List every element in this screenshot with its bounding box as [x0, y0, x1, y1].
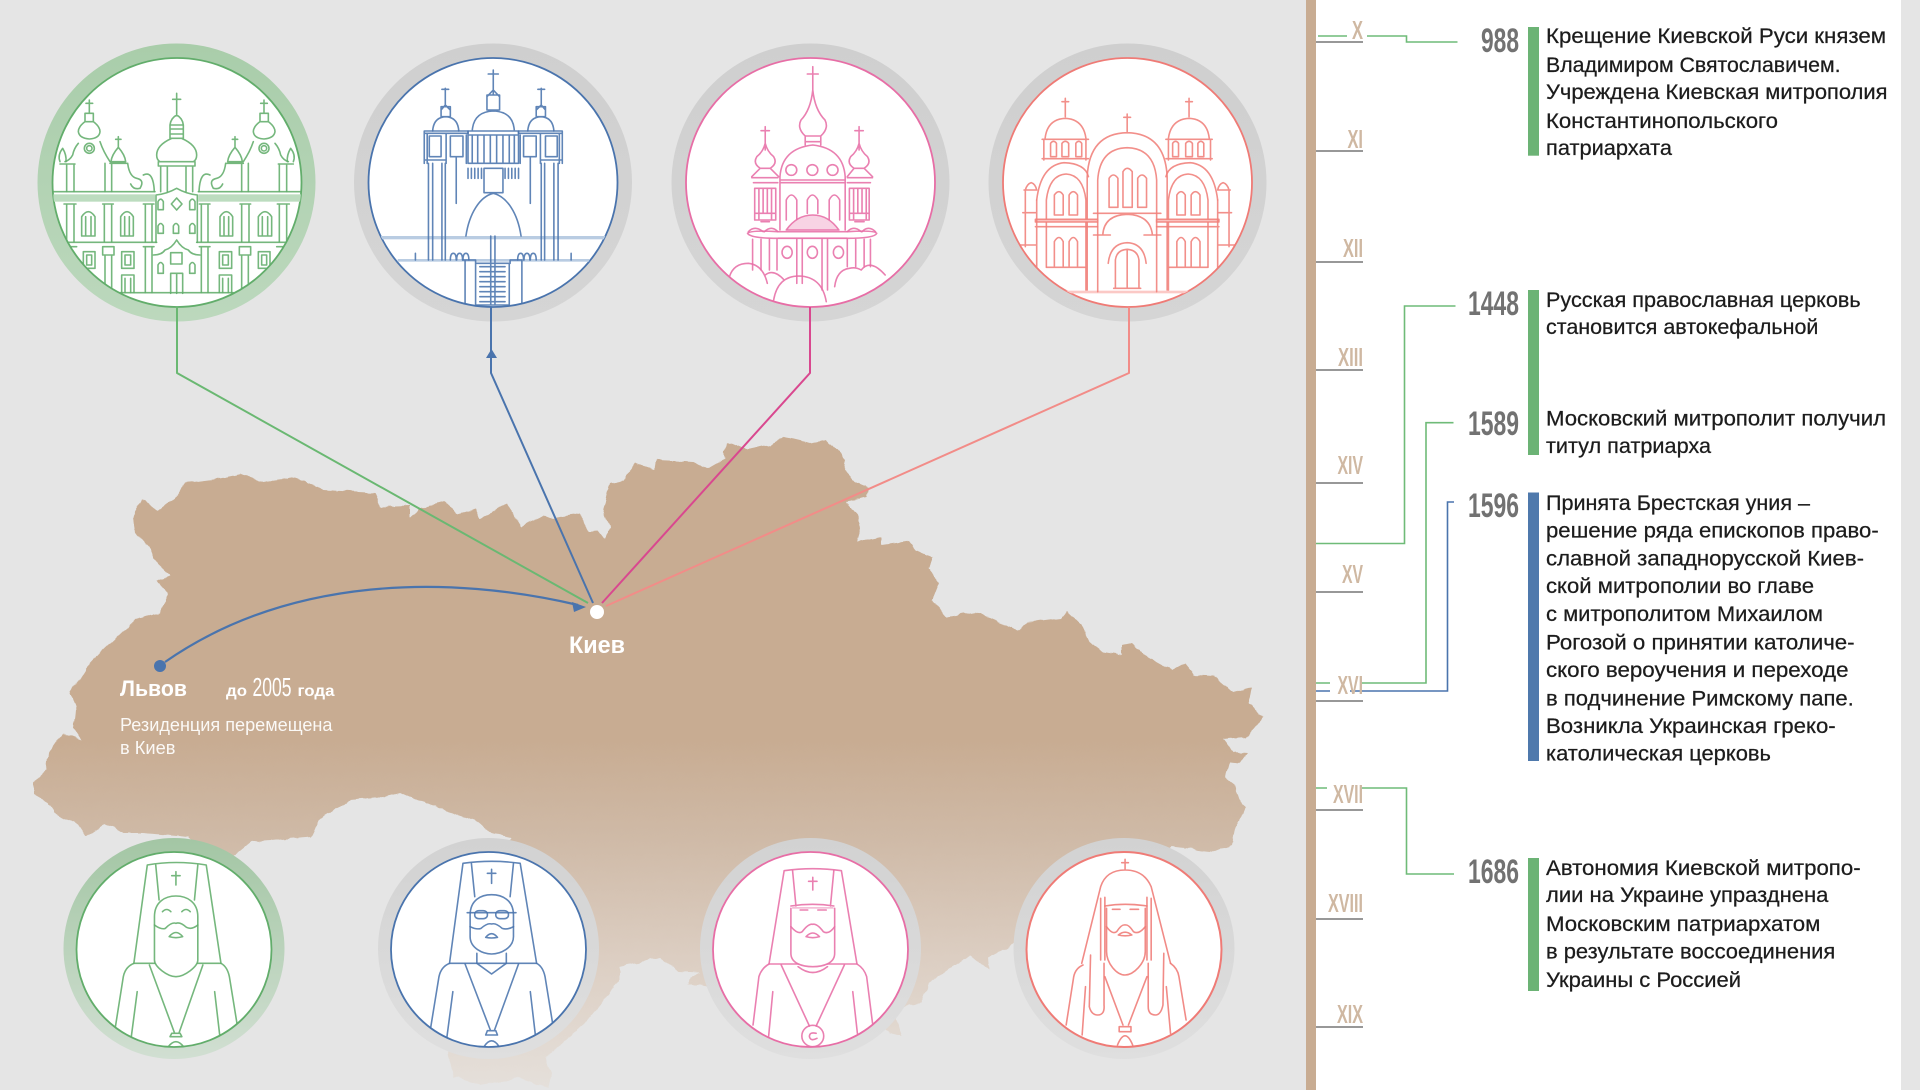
event 988: Владимиром Святославичем. — [1546, 54, 1840, 77]
events 1448 and 1589 — [1468, 285, 1886, 458]
century labels: XVII — [1333, 779, 1363, 809]
century labels: XI — [1348, 124, 1363, 154]
century labels: XII — [1343, 233, 1363, 263]
event 1596: Рогозой о принятии католиче- — [1546, 632, 1855, 655]
event 1596: католическая церковь — [1546, 742, 1771, 766]
label: Lviv until 2005: 2005 — [252, 672, 292, 702]
caption: residence moved — [120, 715, 333, 758]
century labels: XIII — [1338, 342, 1363, 372]
Lviv marker — [154, 660, 166, 672]
portrait 4: salmon patriarch — [1014, 838, 1234, 1059]
event 1596: 1596 — [1468, 487, 1519, 525]
event 1596: ской митрополии во главе — [1546, 575, 1814, 598]
portrait 1: green bishop — [64, 838, 284, 1059]
event 1686: в результате воссоединения — [1546, 941, 1835, 964]
move arrow from Lviv to Kiev — [165, 587, 586, 662]
label: Lviv until 2005: года — [298, 683, 335, 700]
label: Lviv until 2005 — [120, 672, 335, 702]
century labels: XIV — [1338, 450, 1363, 480]
arrowhead on blue line — [486, 349, 497, 358]
event 1596: Принята Брестская уния – — [1546, 492, 1810, 515]
event 1686: лии на Украине упразднена — [1546, 884, 1829, 907]
events 1448 and 1589: Русская православная церковь — [1546, 289, 1861, 312]
panel: timeline background — [1316, 0, 1901, 1090]
event 1686: Московским патриархатом — [1546, 913, 1820, 936]
building medallion 4: Vladimir cathedral — [988, 44, 1266, 322]
century labels: X — [1352, 15, 1363, 45]
century labels: XIX — [1337, 999, 1363, 1029]
building medallion 2: cathedral — [354, 44, 632, 322]
connector lines from buildings to Kiev — [177, 307, 1129, 606]
events 1448 and 1589: 1448 — [1468, 285, 1519, 323]
connector: 988 — [1318, 36, 1458, 42]
event 1596: решение ряда епископов право- — [1546, 520, 1879, 543]
event 1596: с митрополитом Михаилом — [1546, 603, 1823, 626]
caption: residence moved: Резиденция перемещена — [120, 715, 333, 735]
event 1596: ского вероучения и переходе — [1546, 659, 1848, 682]
century labels: XVIII — [1328, 888, 1363, 918]
event 1596: славной западнорусской Киев- — [1546, 548, 1864, 571]
event 1596: в подчинение Римскому папе. — [1546, 688, 1854, 711]
portrait 2: blue bishop with glasses — [378, 838, 599, 1059]
connector: 1448 — [1316, 306, 1456, 544]
caption: residence moved: в Киев — [120, 738, 176, 758]
events 1448 and 1589: титул патриарха — [1546, 435, 1711, 458]
label: Kiev: Киев — [569, 632, 625, 659]
event 1686 — [1468, 853, 1861, 992]
events 1448 and 1589: Московский митрополит получил — [1546, 408, 1886, 431]
building medallion 1: Lavra — [38, 44, 316, 322]
Kiev marker — [590, 605, 604, 619]
connector: 1596 — [1316, 502, 1454, 691]
timeline vertical bar — [1306, 0, 1316, 1090]
connector: 1686 — [1316, 788, 1454, 874]
connector: 1589 — [1316, 423, 1454, 683]
event 988: Крещение Киевской Руси князем — [1546, 25, 1886, 48]
event 1686: 1686 — [1468, 853, 1519, 891]
century labels: XVI — [1338, 670, 1363, 700]
map of Ukraine — [34, 437, 1263, 1087]
event 1596 — [1468, 487, 1879, 766]
century axis ticks — [1316, 42, 1363, 1027]
event 988: Учреждена Киевская митрополия — [1546, 81, 1888, 104]
event 988 — [1481, 22, 1888, 160]
label: Lviv until 2005: Львов — [120, 676, 187, 701]
label: Lviv until 2005: до — [226, 683, 247, 700]
events 1448 and 1589: становится автокефальной — [1546, 316, 1818, 339]
century labels — [1328, 15, 1363, 1029]
portrait 3: pink bishop with medallion — [700, 838, 921, 1059]
century labels: XV — [1342, 559, 1363, 589]
event 1596: Возникла Украинская греко- — [1546, 715, 1836, 738]
event 988: патриархата — [1546, 137, 1672, 160]
event 1686: Автономия Киевской митропо- — [1546, 857, 1861, 880]
event 988: Константинопольского — [1546, 110, 1778, 133]
building medallion 3: baroque church — [672, 44, 950, 322]
event 988: 988 — [1481, 22, 1519, 60]
events 1448 and 1589: 1589 — [1468, 405, 1519, 443]
event 1686: Украины с Россией — [1546, 969, 1741, 992]
